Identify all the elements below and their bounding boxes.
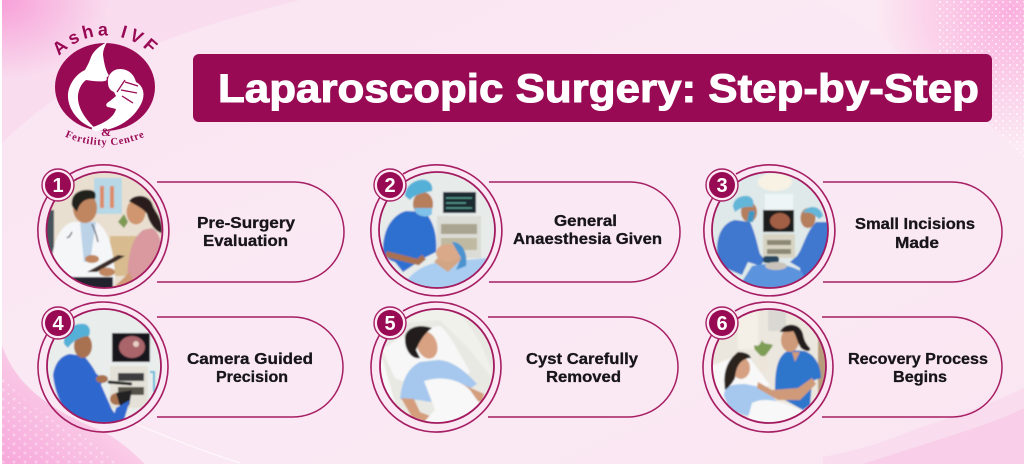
- step 6: Recovery Process Begins: [703, 302, 1002, 432]
- label: Evaluation: [203, 233, 288, 250]
- pill outline: [157, 317, 343, 417]
- label: Cyst Carefully: [526, 351, 638, 368]
- label: [848, 351, 988, 386]
- label: [513, 213, 662, 248]
- photo: patient resting in bed: [380, 309, 494, 423]
- inner ring: [712, 172, 828, 288]
- number badge: [42, 307, 74, 339]
- logo: Asha IVF and Fertility Centre: [54, 25, 158, 148]
- inner ring: [47, 309, 161, 423]
- step 4: Camera Guided Precision: [38, 302, 343, 432]
- logo: brand arc text: Asha IVF: [54, 25, 158, 56]
- inner ring: [712, 309, 826, 423]
- outer ring: [371, 302, 501, 432]
- label: [855, 216, 975, 252]
- label: Pre-Surgery: [197, 215, 295, 232]
- label: [197, 215, 295, 250]
- logo: subtitle arc text: Fertility Centre: [65, 130, 144, 148]
- number badge: 2: [384, 175, 396, 197]
- number badge: [706, 307, 738, 339]
- number badge: 6: [716, 313, 728, 335]
- outer ring: [704, 165, 835, 296]
- pill outline: [157, 182, 344, 282]
- inner ring: [379, 172, 495, 288]
- photo: surgeons in theatre: [712, 172, 828, 288]
- step 1: Pre-Surgery Evaluation: [38, 165, 344, 296]
- label: Precision: [216, 369, 288, 386]
- number badge: 1: [52, 175, 64, 197]
- pill outline: [489, 182, 680, 282]
- number badge: 3: [716, 175, 728, 197]
- logo: mother and baby silhouette: [68, 42, 143, 131]
- step 5: Cyst Carefully Removed: [371, 302, 678, 432]
- number badge: 4: [52, 313, 64, 335]
- label: [187, 351, 313, 386]
- photo: doctor with patient: [46, 172, 164, 289]
- label: Small Incisions: [855, 216, 975, 233]
- title banner: [193, 54, 992, 122]
- photo: nurse comforting patient: [712, 309, 826, 423]
- photo: anaesthetist and patient: [379, 172, 497, 288]
- label: Made: [895, 235, 939, 252]
- label: General: [554, 213, 617, 230]
- step 3: Small Incisions Made: [704, 165, 1002, 296]
- label: Anaesthesia Given: [513, 231, 662, 248]
- logo: ampersand: &: [101, 125, 111, 139]
- logo circle: [55, 43, 155, 131]
- number badge: [374, 307, 406, 339]
- inner ring: [380, 309, 494, 423]
- logo: baby hand detail: [117, 80, 138, 103]
- label: Recovery Process: [848, 351, 988, 368]
- label: Camera Guided: [187, 351, 313, 368]
- pill outline: [488, 317, 678, 417]
- outer ring: [38, 165, 169, 296]
- label: Removed: [546, 369, 621, 386]
- number badge: 5: [384, 313, 396, 335]
- number badge: [42, 169, 74, 201]
- pill outline: [822, 317, 1002, 417]
- number badge: [374, 169, 406, 201]
- pill outline: [823, 182, 1002, 282]
- label: [526, 351, 638, 386]
- outer ring: [371, 165, 502, 296]
- step 2: General Anaesthesia Given: [371, 165, 680, 296]
- title: Laparoscopic Surgery: Step-by-Step: [218, 67, 979, 111]
- inner ring: [46, 172, 162, 288]
- label: Begins: [893, 369, 947, 386]
- outer ring: [38, 302, 168, 432]
- number badge: [706, 169, 738, 201]
- photo: surgeon at camera monitor: [47, 309, 161, 423]
- outer ring: [703, 302, 833, 432]
